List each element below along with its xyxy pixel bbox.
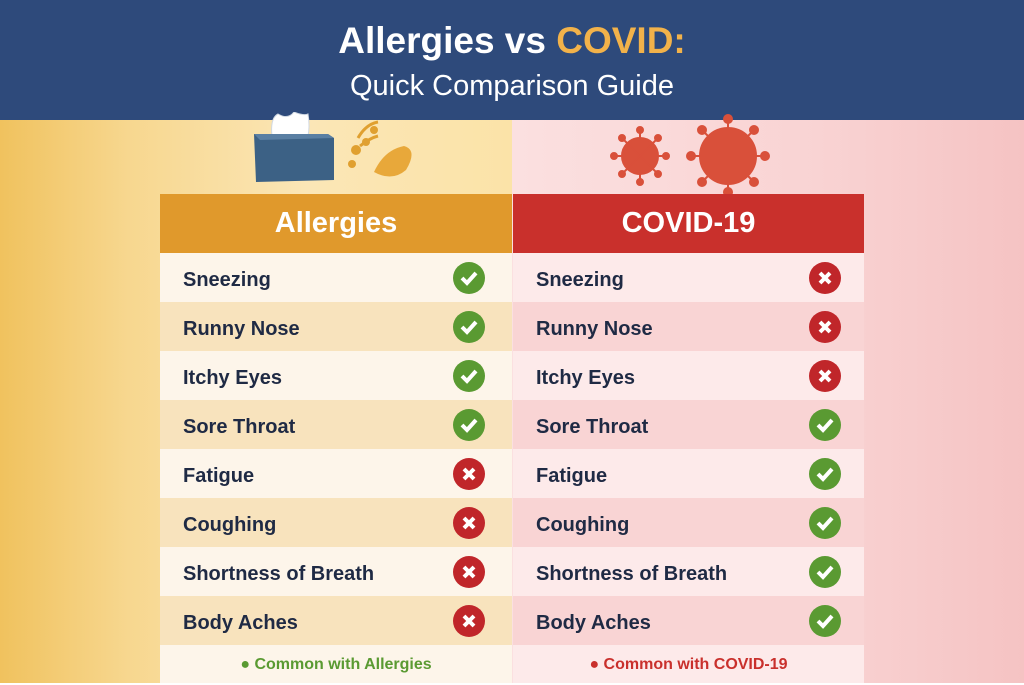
panel: allergies column <box>160 194 512 683</box>
row: Runny Nose <box>160 302 512 351</box>
row: Sore Throat: Sore Throat <box>183 416 295 438</box>
header banner <box>0 0 1024 120</box>
row: Fatigue <box>160 449 512 498</box>
row: Coughing <box>160 498 512 547</box>
row: Sneezing: Sneezing <box>183 269 271 291</box>
row: Body Aches <box>513 596 864 645</box>
background right <box>512 120 1024 683</box>
row: Body Aches: Body Aches <box>536 612 651 634</box>
row: Fatigue <box>513 449 864 498</box>
row: Runny Nose: Runny Nose <box>183 318 300 340</box>
row: Sore Throat <box>160 400 512 449</box>
row: Shortness of Breath <box>160 547 512 596</box>
row: Itchy Eyes <box>160 351 512 400</box>
subtitle: Quick Comparison Guide <box>350 70 674 102</box>
panel: covid column <box>513 194 864 683</box>
icon: tissue box and leaves <box>254 112 412 182</box>
row: Coughing: Coughing <box>183 514 276 536</box>
row: Coughing: Coughing <box>536 514 629 536</box>
row: Coughing <box>513 498 864 547</box>
row: Sneezing <box>513 253 864 302</box>
row: Itchy Eyes: Itchy Eyes <box>536 367 635 389</box>
legend: common with covid <box>513 645 864 683</box>
row: Itchy Eyes <box>513 351 864 400</box>
row: Sore Throat <box>513 400 864 449</box>
row: Body Aches: Body Aches <box>183 612 298 634</box>
heading: COVID-19: COVID-19 <box>622 207 755 239</box>
legend: common with allergies: ● Common with Allergies <box>240 656 432 673</box>
row: Sore Throat: Sore Throat <box>536 416 648 438</box>
row: Body Aches <box>160 596 512 645</box>
icon: viruses <box>610 114 770 194</box>
row: Shortness of Breath: Shortness of Breath <box>536 563 727 585</box>
row: Sneezing: Sneezing <box>536 269 624 291</box>
row: Runny Nose <box>513 302 864 351</box>
title: Allergies vs COVID: <box>338 20 686 61</box>
row: Runny Nose: Runny Nose <box>536 318 653 340</box>
row: Fatigue: Fatigue <box>183 465 254 487</box>
heading: Allergies <box>160 194 512 253</box>
background left <box>0 120 512 683</box>
row: Fatigue: Fatigue <box>536 465 607 487</box>
row: Sneezing <box>160 253 512 302</box>
row: Shortness of Breath <box>513 547 864 596</box>
row: Itchy Eyes: Itchy Eyes <box>183 367 282 389</box>
heading: COVID-19 <box>513 194 864 253</box>
legend: common with allergies <box>160 645 512 683</box>
legend: common with covid: ● Common with COVID-19 <box>589 656 788 673</box>
heading: Allergies: Allergies <box>275 207 397 239</box>
row: Shortness of Breath: Shortness of Breath <box>183 563 374 585</box>
